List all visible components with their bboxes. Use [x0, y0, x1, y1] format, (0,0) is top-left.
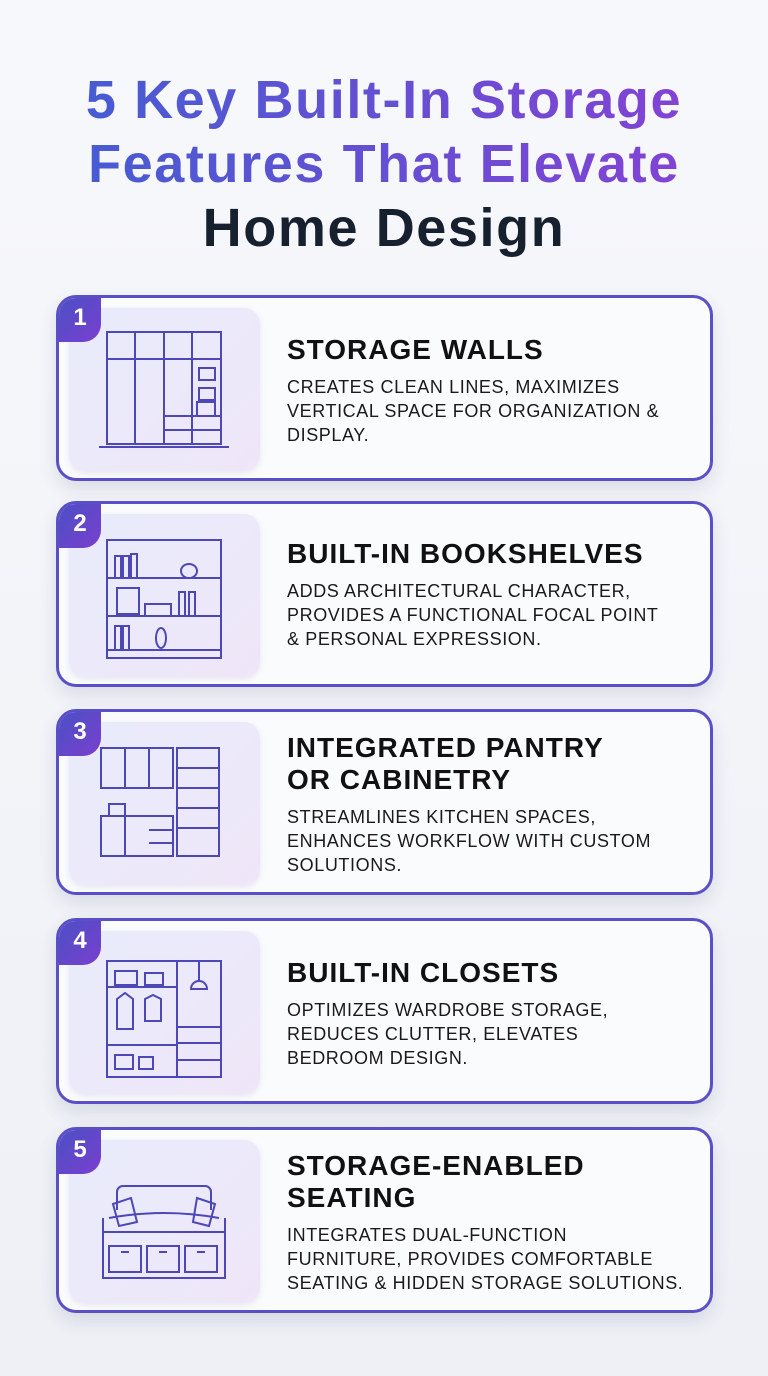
icon: pantry [69, 722, 260, 885]
text: REDUCES CLUTTER, ELEVATES [287, 1024, 578, 1044]
badge 2 [59, 504, 101, 548]
text: SEATING & HIDDEN STORAGE SOLUTIONS. [287, 1273, 683, 1293]
text [287, 732, 651, 875]
text: OR CABINETRY [287, 764, 511, 795]
panel: storage walls [56, 295, 713, 481]
text: BEDROOM DESIGN. [287, 1048, 468, 1068]
icon: storage wall [69, 308, 260, 471]
text [287, 334, 659, 445]
panel: pantry [56, 709, 713, 895]
text: INTEGRATED PANTRY [287, 732, 604, 763]
text: BUILT-IN CLOSETS [287, 957, 559, 988]
text: SEATING [287, 1182, 416, 1213]
panel: bookshelves [56, 501, 713, 687]
badge 1 [59, 298, 101, 342]
title: Features That Elevate [88, 134, 680, 194]
icon: closet [69, 931, 260, 1094]
panel: seating [56, 1127, 713, 1313]
text: PROVIDES A FUNCTIONAL FOCAL POINT [287, 605, 659, 625]
text: STORAGE WALLS [287, 334, 544, 365]
icon: storage bench [69, 1140, 260, 1303]
text: FURNITURE, PROVIDES COMFORTABLE [287, 1249, 653, 1269]
text: VERTICAL SPACE FOR ORGANIZATION & [287, 401, 659, 421]
title: Home Design [203, 198, 565, 258]
text [287, 957, 608, 1068]
badge 1: 1 [73, 304, 87, 331]
text: DISPLAY. [287, 425, 369, 445]
text: STREAMLINES KITCHEN SPACES, [287, 807, 596, 827]
badge 4: 4 [73, 927, 87, 954]
text [287, 1150, 683, 1293]
text: INTEGRATES DUAL-FUNCTION [287, 1225, 567, 1245]
text [287, 538, 659, 649]
text: & PERSONAL EXPRESSION. [287, 629, 542, 649]
text: CREATES CLEAN LINES, MAXIMIZES [287, 377, 620, 397]
badge 3 [59, 712, 101, 756]
badge 5: 5 [73, 1136, 87, 1163]
text: STORAGE-ENABLED [287, 1150, 585, 1181]
badge 4 [59, 921, 101, 965]
badge 5 [59, 1130, 101, 1174]
title [86, 70, 682, 258]
text: ADDS ARCHITECTURAL CHARACTER, [287, 581, 631, 601]
title: 5 Key Built-In Storage [86, 70, 682, 130]
text: BUILT-IN BOOKSHELVES [287, 538, 644, 569]
text: OPTIMIZES WARDROBE STORAGE, [287, 1000, 608, 1020]
badge 3: 3 [73, 718, 87, 745]
icon: bookshelf [69, 514, 260, 677]
text: SOLUTIONS. [287, 855, 402, 875]
badge 2: 2 [73, 510, 87, 537]
panel: closets [56, 918, 713, 1104]
text: ENHANCES WORKFLOW WITH CUSTOM [287, 831, 651, 851]
